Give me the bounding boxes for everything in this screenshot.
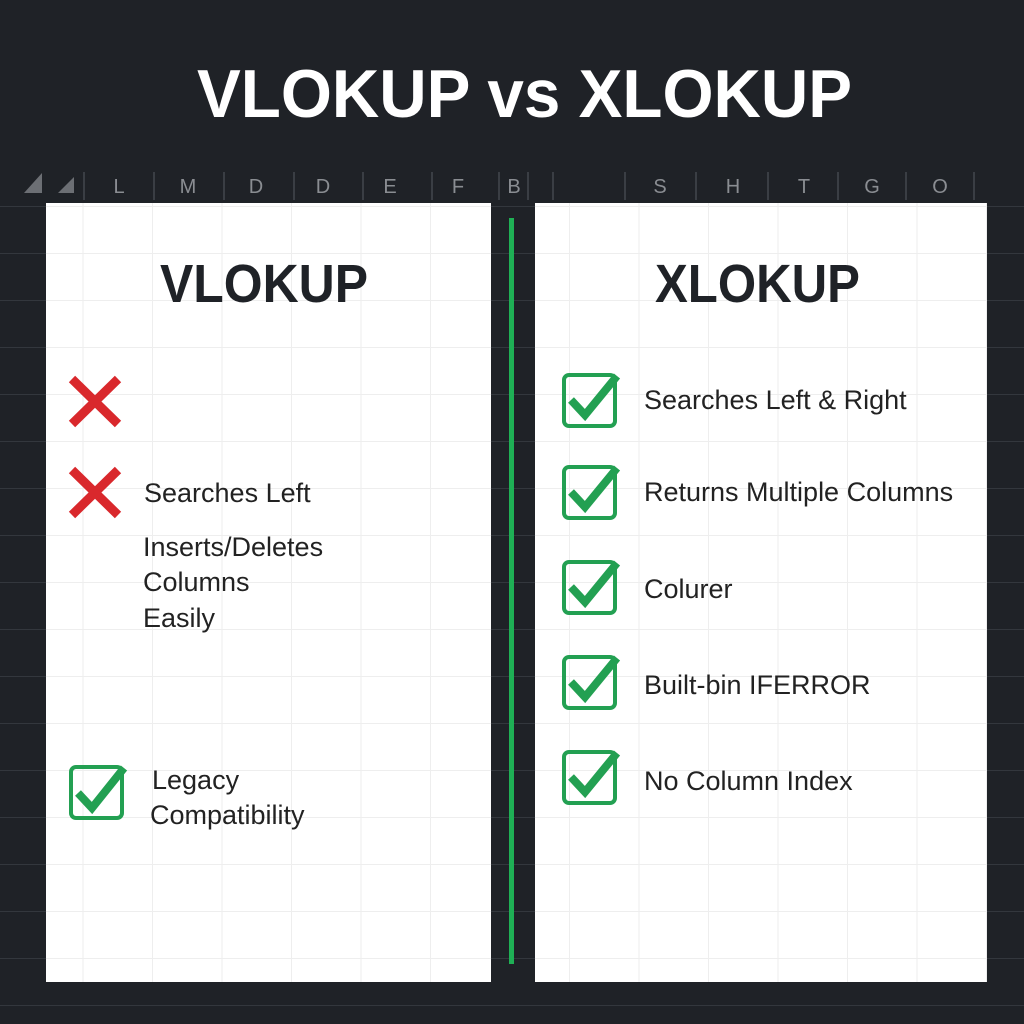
column header row: D <box>316 176 330 198</box>
list: features <box>564 375 953 803</box>
text: inserts/deletes: Easily <box>143 603 216 633</box>
list: features: Colurer <box>644 574 733 604</box>
column header row: O <box>932 176 948 198</box>
column header row: F <box>452 176 464 198</box>
column header row: M <box>180 176 196 198</box>
heading: VLOKUP: VLOKUP <box>160 254 368 314</box>
text: legacy <box>150 765 305 830</box>
list: features: Returns Multiple Columns <box>644 477 953 507</box>
text: legacy: Compatibility <box>150 800 305 830</box>
column header row: T <box>798 176 810 198</box>
icon: red cross 1 <box>72 379 118 424</box>
text: inserts/deletes: Columns <box>143 567 250 597</box>
divider: green line <box>509 218 514 964</box>
text: legacy: Legacy <box>152 765 240 795</box>
column header row <box>24 172 974 200</box>
panel: XLOKUP <box>535 203 987 982</box>
column header row: H <box>726 176 740 198</box>
list: features: Built-bin IFERROR <box>644 670 871 700</box>
column header row: G <box>864 176 880 198</box>
title: VLOKUP vs XLOKUP <box>197 56 852 132</box>
column header row: S <box>653 176 667 198</box>
column header row: B <box>507 176 521 198</box>
icon: green check <box>71 767 124 818</box>
panel: VLOKUP <box>46 203 491 982</box>
icon: red cross 2 <box>72 470 118 515</box>
list: features: No Column Index <box>644 766 853 796</box>
text: inserts/deletes <box>143 532 323 633</box>
text: searches left: Searches Left <box>144 478 311 508</box>
text: inserts/deletes: Inserts/Deletes <box>143 532 323 562</box>
heading: XLOKUP: XLOKUP <box>655 254 860 314</box>
column header row: E <box>383 176 397 198</box>
column header row: D <box>249 176 263 198</box>
list: features: Searches Left & Right <box>644 385 907 415</box>
column header row: L <box>113 176 125 198</box>
